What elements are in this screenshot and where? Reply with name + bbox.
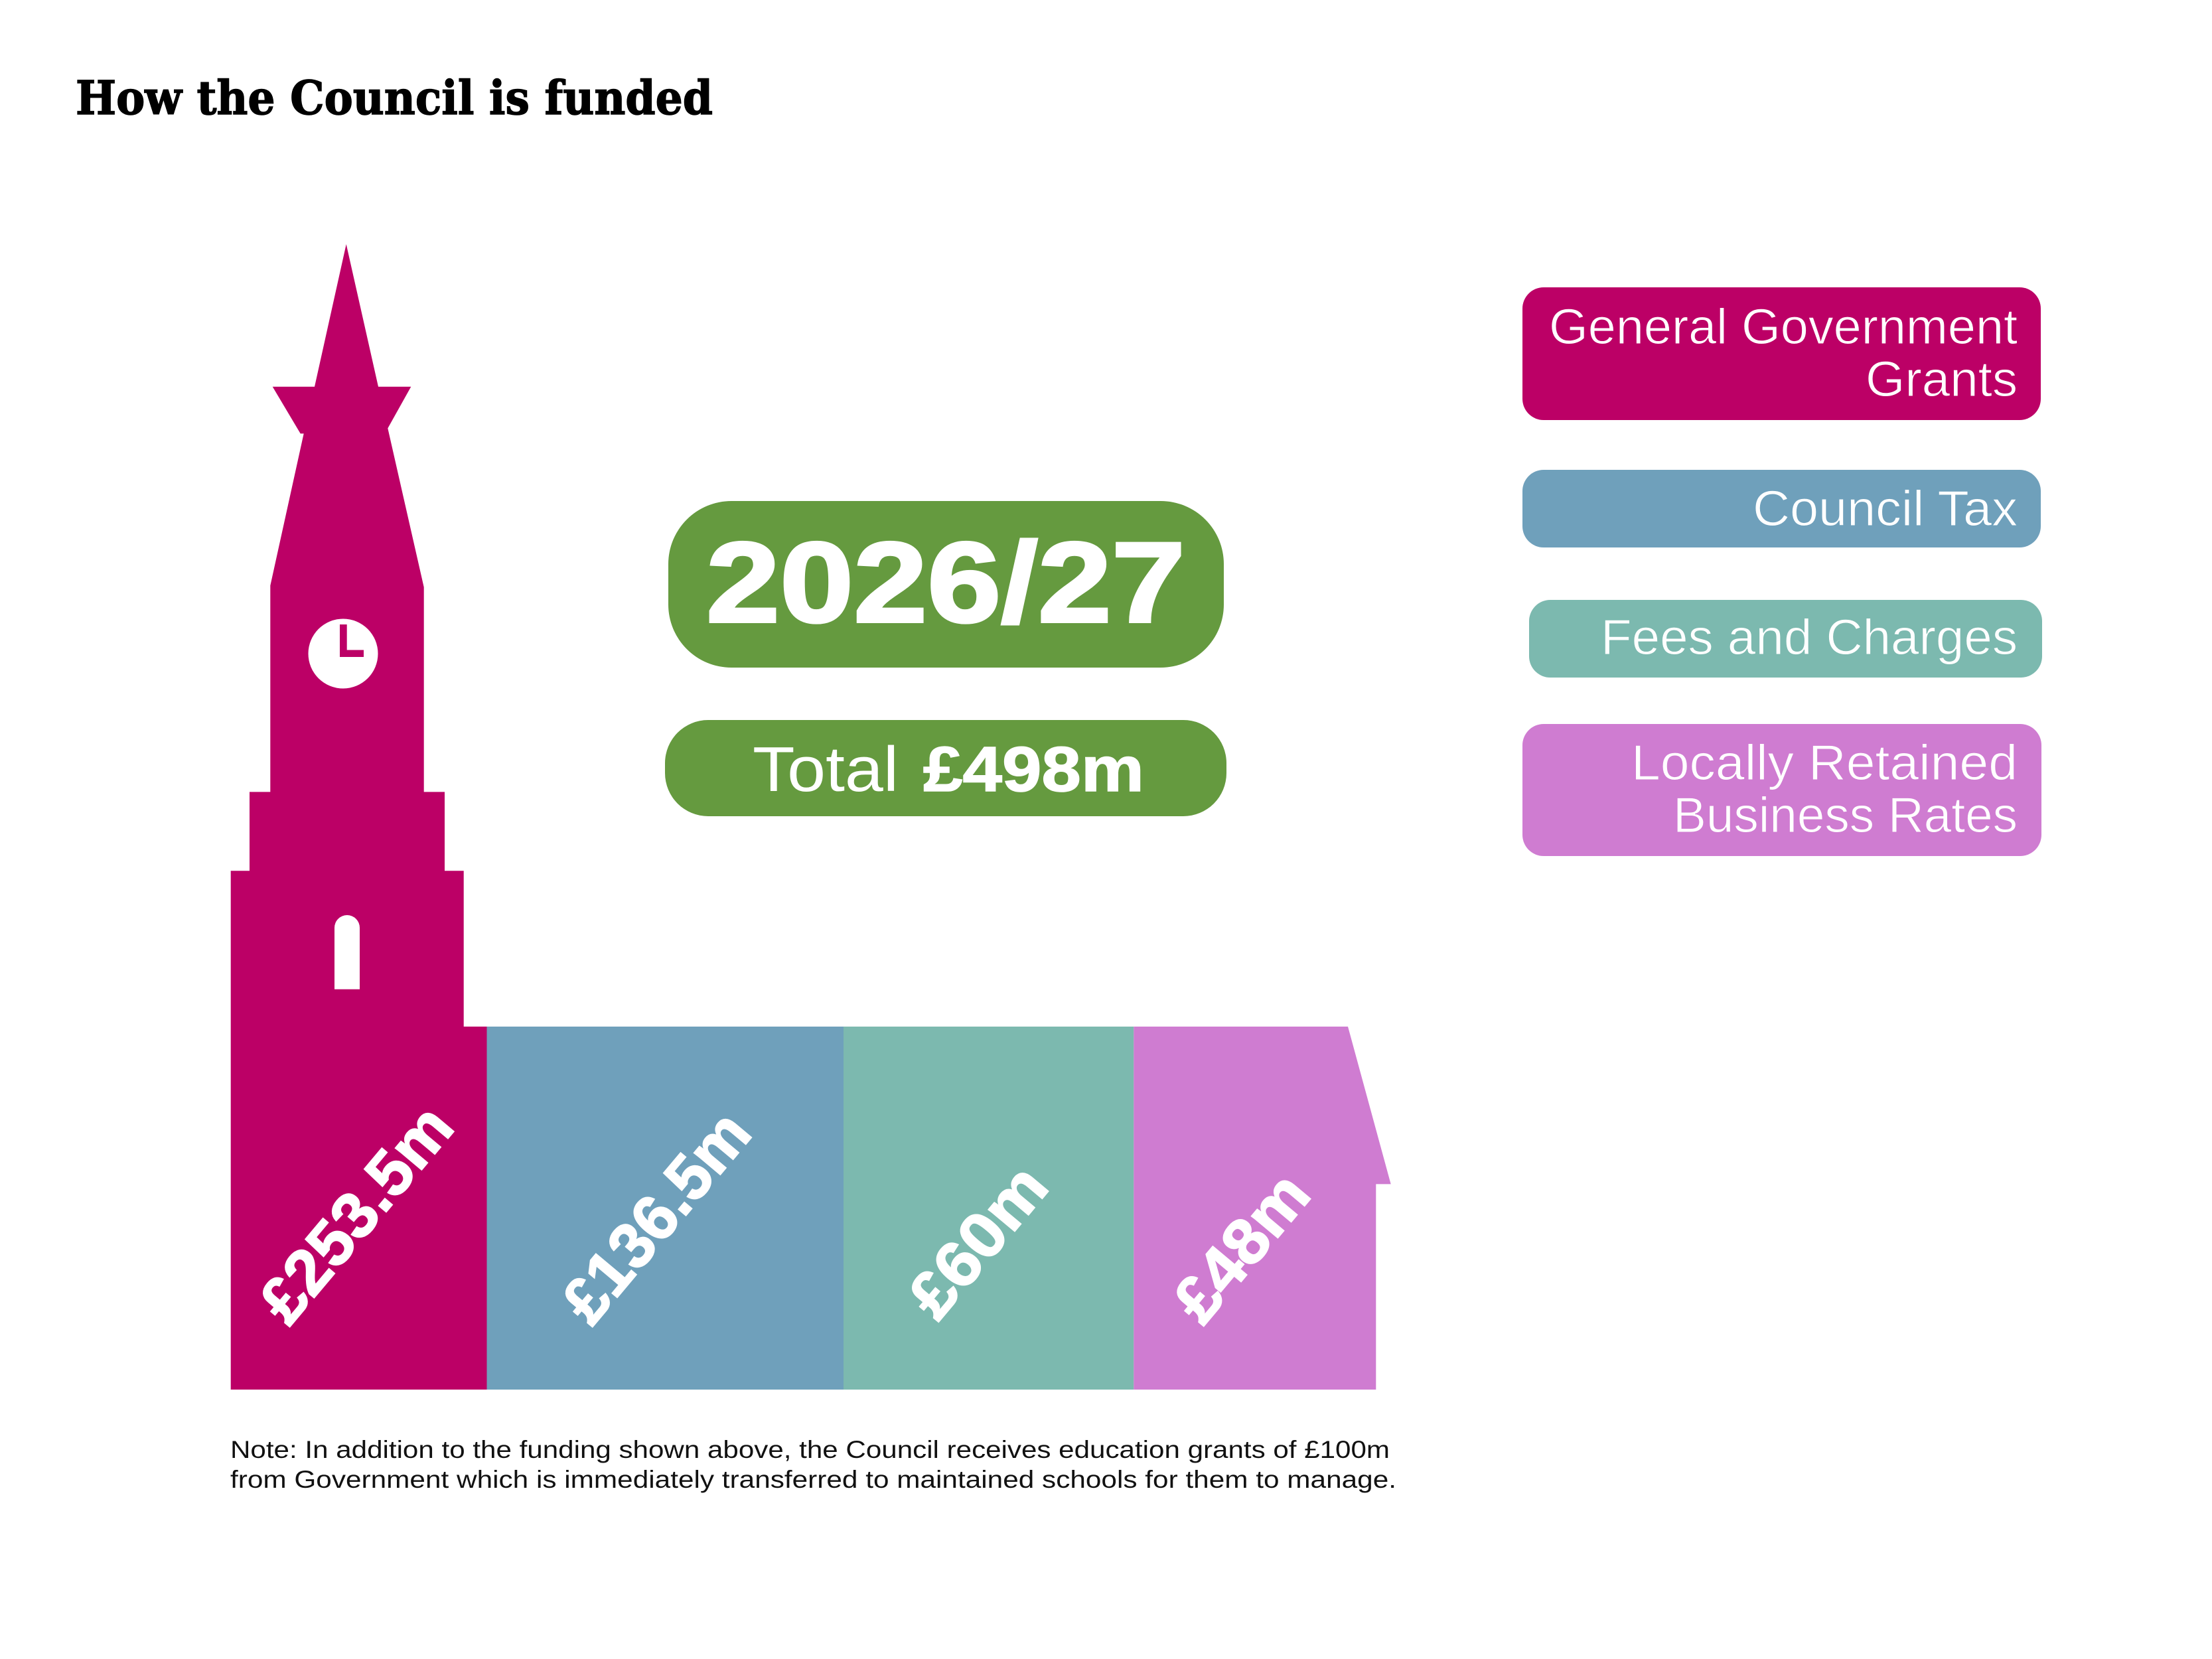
segment: Locally Retained Business Rates <box>1134 1027 1391 1390</box>
legend item: Council Tax <box>1522 470 2041 547</box>
value: General Government Grants: £253.5m <box>244 1091 467 1336</box>
note: from Government which is immediately transferred to maintained schools for them to manage. <box>230 1466 1396 1493</box>
legend item: Fees and Charges <box>1529 600 2042 678</box>
legend item: Locally Retained Business Rates: Locally Retained <box>1631 735 2018 790</box>
year badge: 2026/27 <box>706 519 1185 646</box>
legend item: General Government Grants <box>1522 287 2041 420</box>
title: How the Council is funded <box>76 70 713 125</box>
church funding chart <box>231 244 1391 1390</box>
segment: tower, General Government Grants <box>231 244 487 1390</box>
legend item: Locally Retained Business Rates: Business Rates <box>1673 787 2018 843</box>
note: Note: In addition to the funding shown above, the Council receives education grants of £100m <box>230 1436 1390 1463</box>
legend item: Locally Retained Business Rates <box>1522 724 2041 856</box>
total badge: £498m <box>923 734 1144 805</box>
legend item: General Government Grants: General Government <box>1549 299 2018 354</box>
value: Council Tax: £136.5m <box>547 1097 765 1336</box>
note <box>230 1436 1396 1493</box>
segment: Council Tax <box>487 1027 844 1390</box>
legend item: Fees and Charges: Fees and Charges <box>1601 609 2018 665</box>
legend item: General Government Grants: Grants <box>1866 351 2018 407</box>
segment: Fees and Charges <box>844 1027 1134 1390</box>
year badge <box>668 501 1224 668</box>
value: Fees and Charges: £60m <box>893 1151 1062 1332</box>
icon: clock <box>308 618 378 689</box>
legend item: Council Tax: Council Tax <box>1753 480 2018 536</box>
total badge <box>665 720 1226 816</box>
legend <box>1522 287 2042 856</box>
value: Locally Retained Business Rates: £48m <box>1158 1158 1324 1336</box>
total badge: Total <box>753 734 899 805</box>
